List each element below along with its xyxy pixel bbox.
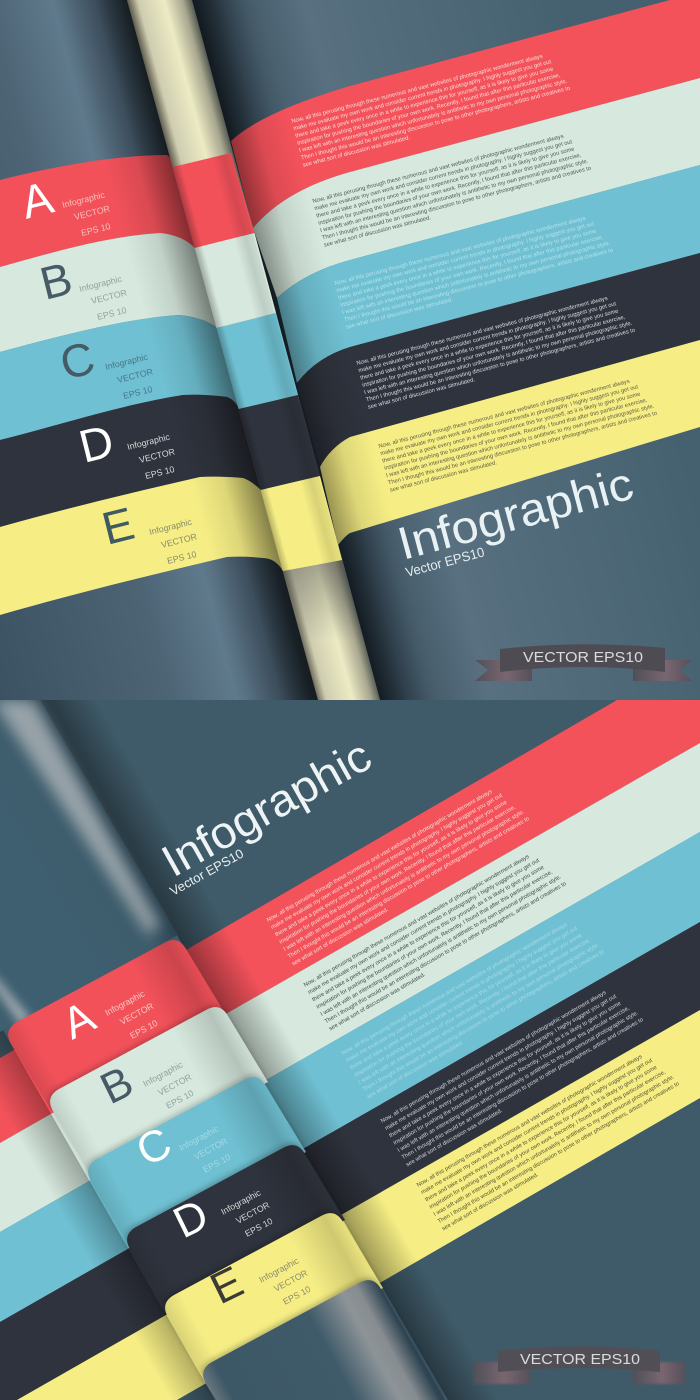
rod highlight [0, 700, 160, 934]
title: Infographic [153, 730, 380, 887]
label C: EPS 10 [122, 384, 154, 401]
label E: Infographic [257, 1255, 301, 1285]
text block: mint: I was left with an interesting question which unfortunately is antithetic to my own personal photographic style. [320, 874, 563, 1018]
tab D [127, 1145, 345, 1315]
text block: red: Now, all this perusing through these numerous and vast websites of photographic wonderment always [291, 54, 543, 125]
text block: red: inspiration for pushing the boundaries of your own work. Recently, I found that after this particular exercise, [297, 72, 561, 147]
text block: mint: Then I thought this would be an interesting discussion to pose to other photographers, artists and creatives to [324, 881, 568, 1025]
tab D shape [127, 1145, 345, 1315]
ribbon left tail [473, 1362, 530, 1384]
rod [0, 700, 178, 1032]
text block: dark: make me evaluate my own work and consider current trends in photography. I highly suggest you get out [358, 301, 617, 374]
text block: red: see what sort of discussion was stimulated. [302, 135, 411, 169]
text block: blue: see what sort of discussion was stimulated. [345, 297, 454, 331]
text block: dark: inspiration for pushing the boundaries of your own work. Recently, I found that after this particular exercise, [393, 1005, 631, 1147]
text block: mint: there and take a peek every once in a while to experience this for yourself, as it is likely to give you some [311, 865, 545, 1003]
text block: dark: see what sort of discussion was stimulated. [367, 377, 476, 411]
label D [127, 434, 175, 479]
letter E: E [97, 497, 139, 555]
panel: bottom spread [0, 700, 700, 1400]
label E [148, 517, 198, 566]
text block: mint: make me evaluate my own work and consider current trends in photography. I highly suggest you get out [307, 858, 541, 996]
text block: mint: there and take a peek every once in a while to experience this for yourself, as it is likely to give you some [316, 147, 575, 220]
label A [103, 988, 159, 1041]
text block: yellow: inspiration for pushing the boundaries of your own work. Recently, I found that after this particular exercise, [429, 1069, 667, 1211]
tab B [41, 264, 127, 320]
rod segment: mint [195, 233, 276, 328]
text block: yellow: I was left with an interesting question which unfortunately is antithetic to my own personal photographic style. [433, 1074, 676, 1218]
text block: blue: Now, all this perusing through these numerous and vast websites of photographic wonderment always [334, 216, 586, 287]
rod body [127, 0, 380, 700]
ribbon band [500, 644, 665, 672]
label A: EPS 10 [80, 221, 112, 238]
page background [0, 700, 700, 1400]
band: red left [0, 155, 195, 267]
letter B: B [35, 252, 77, 310]
ribbon [473, 1346, 685, 1384]
text block: blue: see what sort of discussion was stimulated. [366, 1040, 465, 1100]
stripe: dark [0, 922, 700, 1400]
text block: mint: see what sort of discussion was stimulated. [323, 215, 432, 249]
text block: mint: I was left with an interesting question which unfortunately is antithetic to my own personal photographic style. [320, 158, 589, 234]
tab: slate rod end [203, 1280, 445, 1400]
band: yellow left [0, 477, 283, 615]
letter A: A [55, 992, 103, 1049]
ribbon left tail [475, 660, 532, 681]
ribbon text: VECTOR EPS10 [520, 1351, 640, 1368]
subtitle: Vector EPS10 [167, 846, 246, 899]
text block: blue: there and take a peek every once in a while to experience this for yourself, as it is likely to give you some [338, 229, 597, 302]
text block: red: make me evaluate my own work and consider current trends in photography. I highly suggest you get out [270, 793, 504, 931]
rod fade below yellow [283, 560, 354, 632]
label C: VECTOR [192, 1136, 229, 1162]
text block: dark: inspiration for pushing the boundaries of your own work. Recently, I found that after this particular exercise, [362, 314, 626, 389]
label B: VECTOR [156, 1072, 193, 1098]
band: mint right [253, 78, 700, 298]
stripe: blue [0, 832, 700, 1322]
label E: EPS 10 [166, 549, 198, 566]
rod segment: dark [239, 395, 320, 490]
left page rod shadow [86, 0, 318, 700]
label A [62, 192, 110, 236]
band: dark right [297, 253, 700, 467]
label E: VECTOR [160, 531, 198, 550]
label A: Infographic [61, 190, 106, 210]
text block: mint: Now, all this perusing through these numerous and vast websites of photographic wonderment always [312, 134, 564, 205]
text block: blue: make me evaluate my own work and consider current trends in photography. I highly suggest you get out [345, 926, 579, 1064]
tab D [80, 428, 175, 479]
rod segment: red [173, 153, 254, 248]
text block: dark: I was left with an interesting question which unfortunately is antithetic to my own personal photographic style. [397, 1010, 640, 1154]
label B: Infographic [141, 1059, 185, 1089]
text block: red: Then I thought this would be an interesting discussion to pose to other photographers, artists and creatives to [301, 86, 571, 161]
label A: VECTOR [73, 203, 111, 222]
label A: EPS 10 [128, 1018, 159, 1041]
text block: mint: Now, all this perusing through these numerous and vast websites of photographic wonderment always [303, 854, 531, 989]
text block: mint: see what sort of discussion was stimulated. [328, 972, 427, 1032]
stripes [0, 700, 700, 1400]
letter B: B [93, 1057, 141, 1114]
band: dark left [0, 395, 261, 527]
letter C: C [55, 331, 100, 390]
text block: dark: there and take a peek every once in a while to experience this for yourself, as it is likely to give you some [388, 1001, 622, 1139]
label C: EPS 10 [201, 1152, 232, 1175]
label D: VECTOR [234, 1200, 271, 1226]
text block: blue: Then I thought this would be an interesting discussion to pose to other photographers, artists and creatives to [344, 248, 614, 323]
tab B [50, 1007, 268, 1177]
text block: dark: I was left with an interesting question which unfortunately is antithetic to my own personal photographic style. [364, 320, 633, 396]
letter E: E [203, 1257, 251, 1314]
tab E [165, 1213, 383, 1383]
ribbon right tail [633, 1362, 685, 1384]
text block: dark: Then I thought this would be an interesting discussion to pose to other photographers, artists and creatives to [401, 1017, 645, 1161]
text block: dark: Then I thought this would be an interesting discussion to pose to other photographers, artists and creatives to [366, 328, 636, 403]
text block: yellow: Then I thought this would be an interesting discussion to pose to other photographers, artists and creatives to [437, 1081, 681, 1225]
band: mint left [0, 233, 217, 352]
tab E [103, 508, 197, 564]
letter C: C [129, 1118, 179, 1176]
label D: EPS 10 [243, 1216, 274, 1239]
ribbon text: VECTOR EPS10 [523, 649, 643, 666]
text block: yellow: see what sort of discussion was stimulated. [389, 460, 498, 494]
right page bands [231, 0, 700, 545]
rod segment: blue [216, 313, 298, 409]
tab C shape [88, 1077, 306, 1247]
text block: red: Then I thought this would be an interesting discussion to pose to other photographers, artists and creatives to [287, 816, 531, 960]
letter D: D [166, 1190, 216, 1248]
rod shadow on left bands [0, 1030, 215, 1400]
label C [105, 354, 153, 399]
text block: red: I was left with an interesting question which unfortunately is antithetic to my own personal photographic style. [299, 78, 568, 154]
label E: Infographic [148, 517, 193, 537]
text block: yellow: make me evaluate my own work and consider current trends in photography. I highly suggest you get out [420, 1058, 654, 1196]
band: red right [231, 0, 700, 228]
text block: red: there and take a peek every once in a while to experience this for yourself, as it is likely to give you some [295, 67, 554, 140]
text block: blue: inspiration for pushing the boundaries of your own work. Recently, I found that after this particular exercise, [354, 937, 592, 1079]
text block: mint: Then I thought this would be an interesting discussion to pose to other photographers, artists and creatives to [322, 166, 592, 241]
subtitle: Vector EPS10 [404, 544, 486, 580]
band: blue right [277, 165, 700, 383]
text block: red: I was left with an interesting question which unfortunately is antithetic to my own personal photographic style. [283, 809, 526, 953]
label E [257, 1255, 312, 1307]
text block: blue: Then I thought this would be an interesting discussion to pose to other photographers, artists and creatives to [362, 949, 606, 1093]
letter D: D [74, 414, 119, 473]
rod shadow on right page [40, 700, 508, 1400]
text block: dark: there and take a peek every once in a while to experience this for yourself, as it is likely to give you some [360, 309, 619, 382]
label A: VECTOR [118, 1001, 155, 1027]
label C: Infographic [104, 352, 149, 372]
label E: VECTOR [272, 1268, 309, 1294]
text block: blue: make me evaluate my own work and consider current trends in photography. I highly suggest you get out [336, 221, 595, 294]
label D [219, 1187, 274, 1239]
label B: EPS 10 [164, 1088, 195, 1111]
letter A: A [16, 171, 58, 229]
label E: EPS 10 [281, 1284, 312, 1307]
panel: top spread [0, 0, 700, 700]
title: Infographic [392, 457, 638, 570]
rod segment shading [173, 153, 342, 571]
text block: dark: see what sort of discussion was stimulated. [405, 1108, 504, 1168]
band: blue left [0, 315, 239, 440]
left page background [0, 0, 318, 700]
tab B shape [50, 1007, 268, 1177]
text block: mint: inspiration for pushing the boundaries of your own work. Recently, I found that after this particular exercise, [318, 152, 582, 227]
text block: red: make me evaluate my own work and consider current trends in photography. I highly suggest you get out [293, 59, 552, 132]
ribbon right tail [633, 660, 692, 681]
label B: Infographic [78, 274, 123, 294]
text block: dark: make me evaluate my own work and consider current trends in photography. I highly suggest you get out [384, 994, 618, 1132]
text block: red: see what sort of discussion was stimulated. [291, 907, 390, 967]
text block: dark: Now, all this perusing through these numerous and vast websites of photographic wonderment always [356, 296, 608, 367]
text block: blue: there and take a peek every once in a while to experience this for yourself, as it is likely to give you some [349, 933, 583, 1071]
label D: EPS 10 [144, 464, 176, 481]
label C: Infographic [177, 1123, 221, 1153]
text block: yellow: make me evaluate my own work and consider current trends in photography. I highly suggest you get out [380, 384, 639, 457]
text block: red: Now, all this perusing through these numerous and vast websites of photographic wonderment always [266, 789, 494, 924]
text block: mint: make me evaluate my own work and consider current trends in photography. I highly suggest you get out [314, 139, 573, 212]
label D: Infographic [126, 432, 171, 452]
tab E shape [165, 1213, 383, 1383]
ribbon [475, 644, 692, 681]
left page bands [0, 155, 283, 615]
text block: yellow: there and take a peek every once in a while to experience this for yourself, as it is likely to give you some [382, 392, 641, 465]
text block: yellow: Now, all this perusing through these numerous and vast websites of photographic wonderment always [416, 1054, 644, 1189]
tab C [62, 344, 153, 399]
label C [177, 1123, 232, 1175]
text block: red: inspiration for pushing the boundaries of your own work. Recently, I found that after this particular exercise, [279, 804, 517, 946]
label D: VECTOR [138, 446, 176, 465]
label B [141, 1059, 195, 1111]
text block: yellow: see what sort of discussion was stimulated. [441, 1172, 540, 1232]
tab A [26, 184, 110, 236]
rod body [0, 700, 178, 1032]
text block: yellow: I was left with an interesting question which unfortunately is antithetic to my own personal photographic style. [386, 403, 655, 479]
label B [79, 276, 127, 320]
text block: blue: Now, all this perusing through these numerous and vast websites of photographic wonderment always [341, 922, 569, 1057]
label C: VECTOR [116, 366, 154, 385]
stripe: red [0, 700, 700, 1143]
label B: VECTOR [90, 287, 128, 306]
tab A [8, 940, 226, 1110]
rod second highlight [0, 975, 30, 1026]
tab A shape [8, 940, 226, 1110]
text block: red: there and take a peek every once in a while to experience this for yourself, as it is likely to give you some [274, 800, 508, 938]
stripe: mint [0, 743, 700, 1232]
text block: blue: inspiration for pushing the boundaries of your own work. Recently, I found that after this particular exercise, [340, 234, 604, 309]
band: yellow right [320, 340, 700, 545]
label D: Infographic [219, 1187, 263, 1217]
text block: blue: I was left with an interesting question which unfortunately is antithetic to my own personal photographic style. [358, 942, 601, 1086]
stripe: yellow [17, 1010, 700, 1400]
tab C [88, 1077, 306, 1247]
text block: yellow: inspiration for pushing the boundaries of your own work. Recently, I found that after this particular exercise, [384, 397, 648, 472]
text block: yellow: Then I thought this would be an interesting discussion to pose to other photographers, artists and creatives to [388, 411, 658, 486]
right page rod shadow [192, 0, 408, 700]
label B: EPS 10 [96, 305, 128, 322]
rod segment: yellow [261, 476, 342, 571]
right page background [192, 0, 700, 700]
text block: yellow: there and take a peek every once in a while to experience this for yourself, as it is likely to give you some [424, 1065, 658, 1203]
text block: yellow: Now, all this perusing through these numerous and vast websites of photographic wonderment always [378, 379, 630, 450]
text block: mint: inspiration for pushing the boundaries of your own work. Recently, I found that after this particular exercise, [316, 869, 554, 1011]
rod [127, 0, 380, 700]
text block: dark: Now, all this perusing through these numerous and vast websites of photographic wonderment always [380, 990, 608, 1125]
text block: blue: I was left with an interesting question which unfortunately is antithetic to my own personal photographic style. [342, 240, 611, 316]
label A: Infographic [103, 988, 147, 1018]
ribbon band [498, 1346, 660, 1372]
